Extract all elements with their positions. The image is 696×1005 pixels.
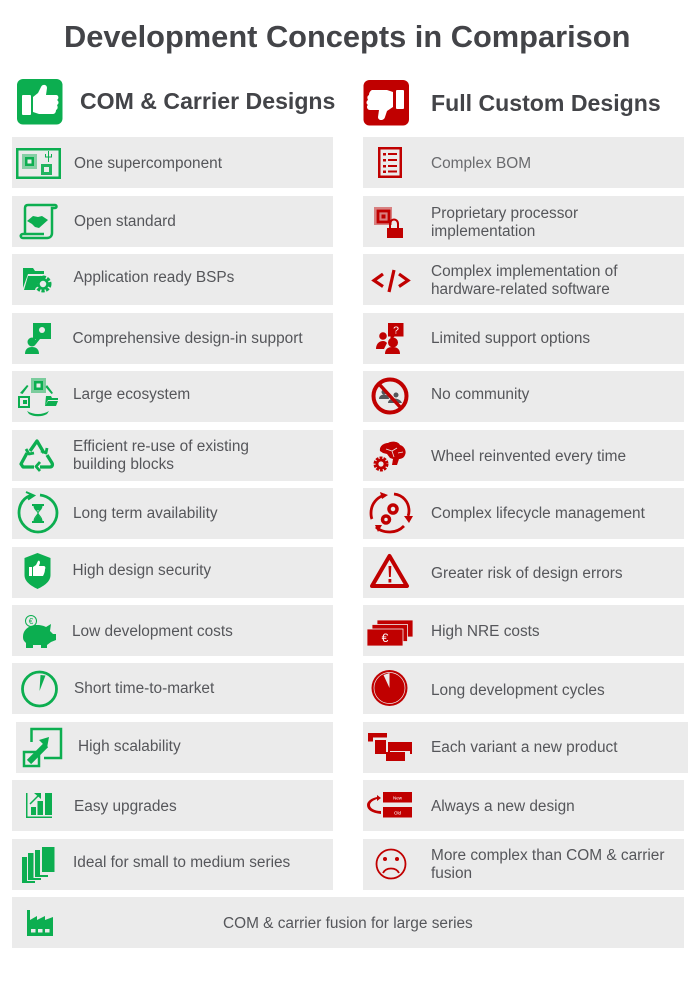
row: Ideal for small to medium series (12, 839, 333, 890)
row: Application ready BSPs (12, 254, 333, 305)
label: Limited support options: Limited support options (431, 330, 590, 347)
label: Short time-to-market: Short time-to-market (74, 680, 214, 697)
heading: Full Custom Designs: Full Custom Designs (431, 90, 661, 116)
label: Long development cycles: Long development cycles (431, 682, 605, 699)
icon: red thumbs down (364, 80, 409, 126)
icon: lifecycle gears (371, 492, 413, 532)
row: Low development costs (12, 605, 333, 656)
row: High NRE costs (363, 605, 684, 656)
icon: scroll handshake (21, 205, 56, 238)
row: Always a new design (363, 780, 684, 831)
row: Long term availability (12, 488, 333, 539)
row: More complex (363, 839, 684, 890)
row: Limited support options (363, 313, 684, 364)
icon: piggy bank: € (29, 617, 34, 626)
label: COM & carrier fusion: COM & carrier fusion for large series (223, 915, 473, 932)
row: COM & carrier fusion (12, 897, 684, 948)
row: One supercomponent (12, 137, 333, 188)
icon: hourglass cycle (19, 492, 57, 532)
label: Easy upgrades: Easy upgrades (74, 798, 177, 815)
icon: shield thumb (24, 553, 50, 589)
label: Proprietary processor (431, 205, 578, 240)
icon: no community (374, 380, 406, 412)
icon: long development clock (372, 670, 408, 706)
row: Complex implementation (363, 254, 684, 305)
label: Long term availability: Long term availability (73, 505, 218, 522)
label: High design security: High design security (72, 562, 211, 579)
label: Complex BOM: Complex BOM (431, 155, 531, 172)
label: Greater risk: Greater risk of design errors (431, 565, 623, 582)
label: Complex implementation (431, 263, 618, 298)
row: High scalability (16, 722, 333, 773)
icon: short time clock (22, 672, 56, 706)
label: Complex implementation: hardware-related software (431, 281, 610, 298)
label: Complex lifecycle management: Complex lifecycle management (431, 505, 645, 522)
heading: COM & Carrier Designs: COM & Carrier Designs (80, 88, 335, 114)
title: Development Concepts in Comparison (64, 19, 630, 54)
row: High design security (12, 547, 333, 598)
label: Proprietary processor: implementation (431, 223, 535, 240)
label: Complex implementation: Complex implementation of (431, 263, 617, 280)
row: Proprietary processor (363, 196, 684, 247)
icon: ecosystem (18, 378, 58, 416)
label: Ideal for small to medium series: Ideal for small to medium series (73, 854, 290, 871)
row: Each variant (363, 722, 688, 773)
icon: support question: ? (393, 324, 399, 336)
label: Application ready BSPs: Application ready BSPs (74, 269, 234, 286)
label: No community: No community (431, 386, 529, 403)
icon: consultant (25, 323, 51, 354)
label: Always a new design: Always a new design (431, 798, 575, 815)
icon: factory (27, 910, 53, 936)
label: One supercomponent: One supercomponent (74, 155, 222, 172)
row: Large ecosystem (12, 371, 333, 422)
icon: chip lock (374, 207, 403, 238)
icon: code tag (374, 270, 408, 292)
row: Greater risk (363, 547, 684, 598)
row: Efficient re-use (12, 430, 333, 481)
row: Complex lifecycle management (363, 488, 684, 539)
label: Open standard: Open standard (74, 213, 176, 230)
icon: warning triangle (372, 556, 407, 586)
label: More complex: fusion (431, 865, 472, 882)
label: Large ecosystem: Large ecosystem (73, 386, 190, 403)
label: Wheel reinvented: Wheel reinvented every time (431, 448, 626, 465)
icon: piggy bank (23, 616, 56, 648)
icon: brain gear (376, 442, 406, 470)
icon: variant blocks (368, 733, 412, 761)
label: Efficient re-use (73, 438, 249, 473)
icon: board (16, 148, 61, 179)
row: Easy upgrades (12, 780, 333, 831)
icon: document stack (22, 847, 54, 883)
icon: new old: Old (394, 810, 401, 816)
row: Short time-to-market (12, 663, 333, 714)
label: Proprietary processor: Proprietary processor (431, 205, 578, 222)
row: Complex BOM (363, 137, 684, 188)
label: High NRE costs: High NRE costs (431, 623, 540, 640)
icon: recycle (21, 441, 52, 471)
label: Low development costs: Low development costs (72, 623, 233, 640)
label: Comprehensive design-in support: Comprehensive design-in support (72, 330, 303, 347)
icon: banknotes: € (382, 631, 389, 645)
row: Wheel reinvented (363, 430, 684, 481)
icon: new old (367, 792, 412, 818)
label: Efficient re-use: Efficient re-use of existing (73, 438, 249, 455)
icon: bar chart (26, 793, 52, 818)
icon: checklist (378, 147, 402, 178)
label: More complex (431, 847, 664, 882)
icon: support question (376, 323, 404, 354)
row: Long development cycles (363, 663, 684, 714)
icon: scalability (24, 729, 61, 766)
row: Comprehensive design-in support (12, 313, 333, 364)
icon: sad face (376, 850, 406, 878)
label: Efficient re-use: building blocks (73, 456, 174, 473)
icon: new old: New (393, 796, 403, 800)
icon: green thumbs up (17, 79, 62, 124)
row: No community (363, 371, 684, 422)
label: High scalability: High scalability (78, 738, 181, 755)
label: More complex: More complex than COM & carrier (431, 847, 664, 864)
row: Open standard (12, 196, 333, 247)
icon: banknotes (367, 620, 413, 646)
label: Each variant: Each variant a new product (431, 739, 618, 756)
icon: folder gear (23, 268, 50, 290)
